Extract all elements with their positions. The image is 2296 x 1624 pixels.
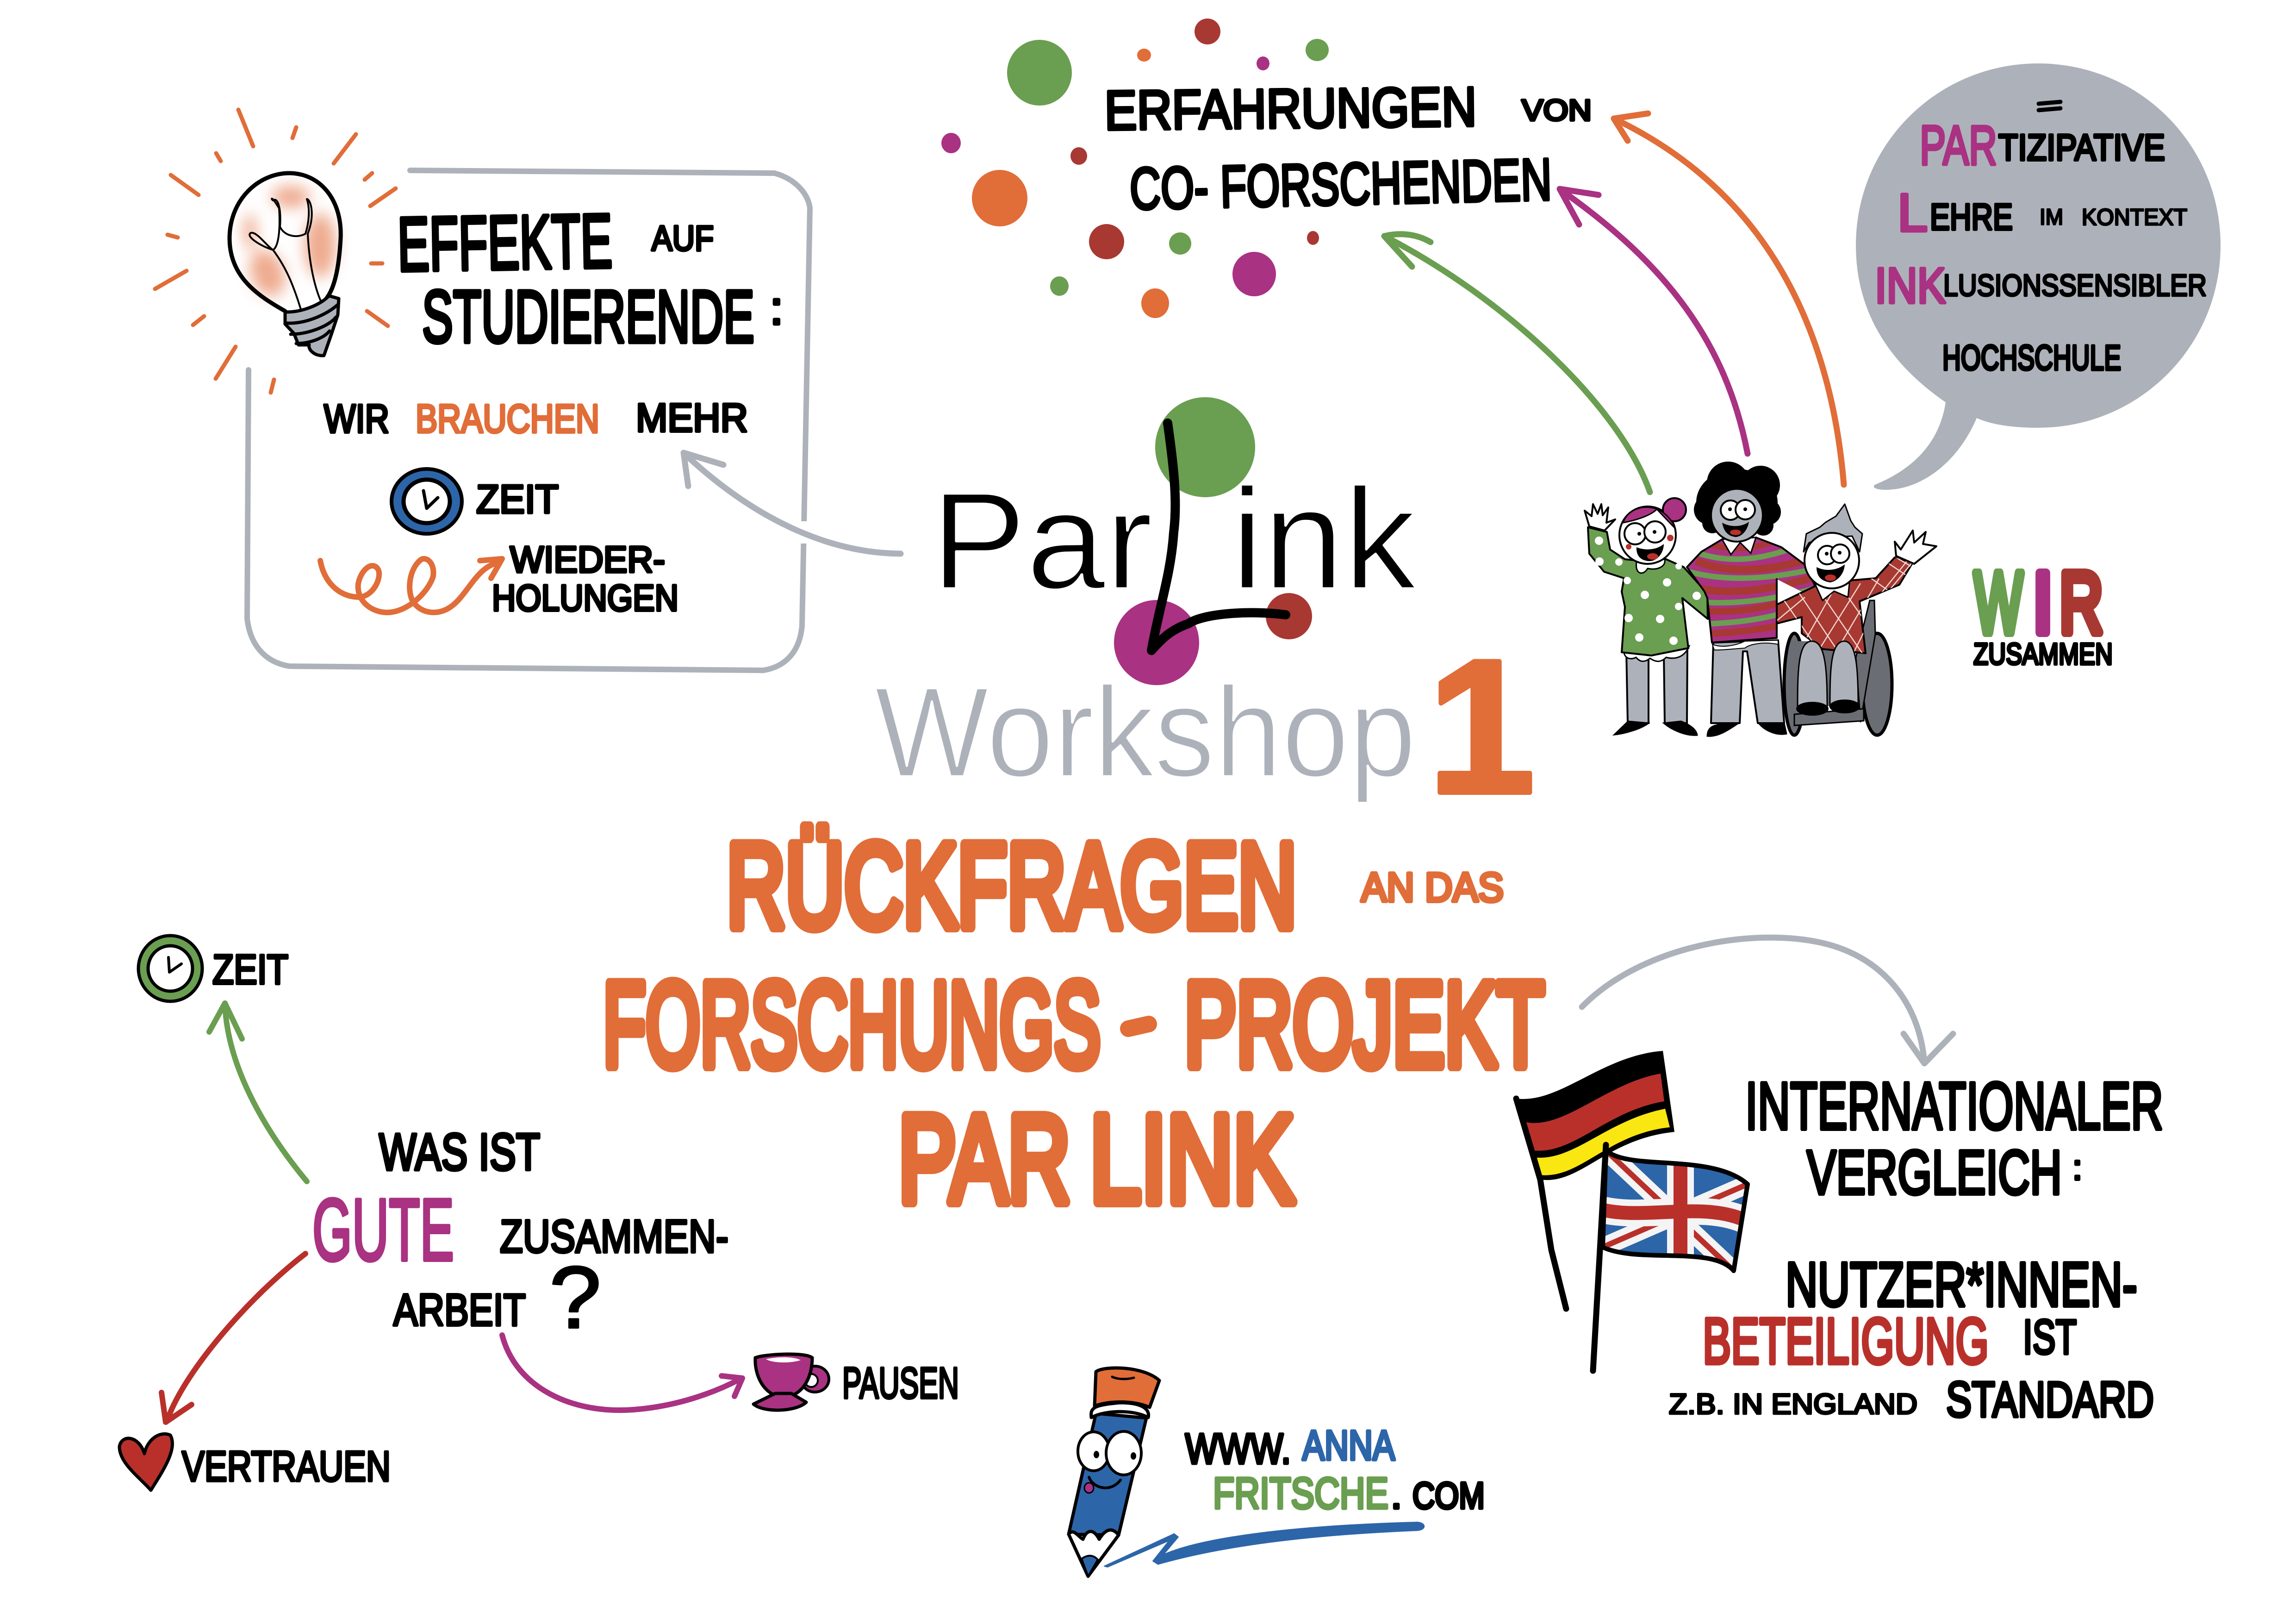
text: PARtizipative xyxy=(1920,114,2165,176)
text: international comparison xyxy=(1669,1068,2163,1427)
website text: . xyxy=(1391,1475,1401,1516)
callout: speech bubble ParLink definition xyxy=(1856,63,2221,490)
text: international comparison: IST xyxy=(2023,1310,2077,1364)
text: international comparison: Z.B. IN ENGLAND xyxy=(1669,1388,1917,1420)
text: Lehre im Kontext: KONTEXT xyxy=(2082,204,2187,230)
label: trust: VERTRAUEN xyxy=(182,1443,391,1490)
website text: FRITSCHE xyxy=(1213,1469,1388,1518)
icon: UK flag xyxy=(1593,1145,1749,1371)
icon: heart xyxy=(119,1434,172,1490)
signature: pencil and website xyxy=(1069,1368,1485,1576)
text: international comparison: BETEILIGUNG xyxy=(1703,1305,1989,1377)
icon: green clock xyxy=(138,936,202,1001)
arrow: orange to von xyxy=(1614,113,1844,485)
equals sign xyxy=(2039,102,2060,110)
arrow: magenta to co-researchers xyxy=(1560,189,1748,454)
text: international comparison: STANDARD xyxy=(1946,1371,2154,1427)
letters WIR: R xyxy=(2060,555,2103,651)
heading: effects on students: : xyxy=(770,282,783,334)
text: we need more xyxy=(324,396,748,441)
label: breaks: PAUSEN xyxy=(842,1359,959,1408)
title line 1: RÜCKFRAGEN xyxy=(727,818,1297,952)
heading: experiences of co-researchers: VON xyxy=(1522,94,1592,127)
decorative zigzag underline xyxy=(1104,1522,1424,1567)
illustration: three people xyxy=(1585,462,1936,736)
person: person with striped sweater xyxy=(1687,462,1817,736)
heading: experiences of co-researchers xyxy=(1104,76,1592,222)
label: repetitions: HOLUNGEN xyxy=(492,577,678,618)
frame of the effects panel xyxy=(247,170,810,670)
icon: light rays xyxy=(155,110,396,393)
logo text Par: Par xyxy=(931,464,1153,618)
text: Lehre im Kontext: EHRE xyxy=(1930,196,2013,237)
label: repetitions xyxy=(492,539,678,618)
text: INKlusionssensibler: INK xyxy=(1875,257,1946,313)
person: man in wheelchair xyxy=(1777,504,1936,735)
label: time: ZEIT xyxy=(212,947,288,993)
text: what is good collaboration: ? xyxy=(549,1249,601,1347)
title line 2: PROJEKT xyxy=(1184,957,1544,1091)
text: what is good collaboration: WAS IST xyxy=(379,1123,540,1181)
title line 2: FORSCHUNGS xyxy=(603,957,1101,1091)
text: what is good collaboration xyxy=(312,1123,728,1347)
title line 3: LINK xyxy=(1090,1089,1294,1228)
website text: COM xyxy=(1412,1475,1485,1516)
arrow: green to co-researchers xyxy=(1384,234,1650,492)
text: PARtizipative: TIZIPATIVE xyxy=(1998,127,2165,168)
icon: orange repeat swirl arrow xyxy=(320,559,502,612)
label: time: ZEIT xyxy=(476,477,559,522)
arrow: magenta to breaks xyxy=(502,1335,742,1410)
text: Lehre im Kontext: L xyxy=(1898,183,1928,243)
text: INKlusionssensibler: LUSIONSSENSIBLER xyxy=(1943,268,2207,302)
text: we need more: MEHR xyxy=(636,396,748,440)
logo: ParLink xyxy=(931,397,1419,685)
website text: WWW. xyxy=(1185,1425,1291,1473)
person: woman in green sweater xyxy=(1585,498,1708,735)
text: PARtizipative: PAR xyxy=(1920,114,1997,176)
title line 3: PAR xyxy=(898,1089,1070,1228)
text: international comparison: : xyxy=(2072,1148,2082,1187)
small text: an das: AN DAS xyxy=(1361,864,1504,910)
text: Hochschule: HOCHSCHULE xyxy=(1942,338,2121,378)
text: we need more: WIR xyxy=(324,397,389,441)
icon: German flag xyxy=(1516,1051,1674,1309)
letters WIR: I xyxy=(2033,555,2053,651)
text: INKlusionssensibler xyxy=(1875,257,2207,313)
logo hand-drawn L xyxy=(1151,423,1286,650)
text: international comparison: VERGLEICH xyxy=(1807,1137,2062,1207)
arrow: green to time xyxy=(209,1003,307,1181)
text: international comparison: NUTZER*INNEN- xyxy=(1786,1249,2137,1319)
label: repetitions: WIEDER- xyxy=(510,539,665,580)
text: what is good collaboration: ARBEIT xyxy=(393,1285,526,1335)
number 1: 1 xyxy=(1428,620,1535,833)
arrow: logo to effects panel xyxy=(684,453,901,554)
dots cluster xyxy=(941,19,1329,318)
heading: experiences of co-researchers: CO- FORSCHENDEN xyxy=(1129,146,1552,222)
letters WIR xyxy=(1974,555,2103,651)
word zusammen: ZUSAMMEN xyxy=(1973,637,2113,671)
heading: effects on students xyxy=(397,198,783,358)
text: what is good collaboration: ZUSAMMEN- xyxy=(500,1211,728,1262)
text: Lehre im Kontext: IM xyxy=(2040,205,2063,230)
main title xyxy=(603,818,1544,1228)
icon: blue clock xyxy=(392,469,462,534)
icon: cup xyxy=(753,1354,829,1410)
arrow: title to international comparison xyxy=(1582,937,1953,1063)
website text xyxy=(1185,1423,1485,1518)
text: we need more: BRAUCHEN xyxy=(416,397,599,441)
panel: effects on students xyxy=(155,110,812,670)
icon: pencil mascot xyxy=(1069,1368,1159,1576)
title line 3 xyxy=(898,1089,1294,1228)
text: Lehre im Kontext xyxy=(1898,183,2187,243)
heading: Workshop: Workshop xyxy=(875,660,1416,805)
heading: effects on students: STUDIERENDE xyxy=(422,275,754,358)
letters WIR: W xyxy=(1974,555,2022,651)
heading: effects on students: EFFEKTE xyxy=(397,198,613,287)
label: WIR zusammen xyxy=(1973,555,2113,671)
gap in frame for arrow xyxy=(794,521,812,543)
text: what is good collaboration: GUTE xyxy=(312,1181,454,1279)
logo text ink: ink xyxy=(1231,458,1419,619)
arrow: red to trust xyxy=(162,1254,305,1422)
website text: ANNA xyxy=(1302,1423,1395,1469)
heading: experiences of co-researchers: ERFAHRUNGEN xyxy=(1104,76,1477,142)
icon: light bulb xyxy=(230,173,341,356)
heading: effects on students: AUF xyxy=(652,219,714,258)
section: good collaboration xyxy=(119,936,959,1490)
